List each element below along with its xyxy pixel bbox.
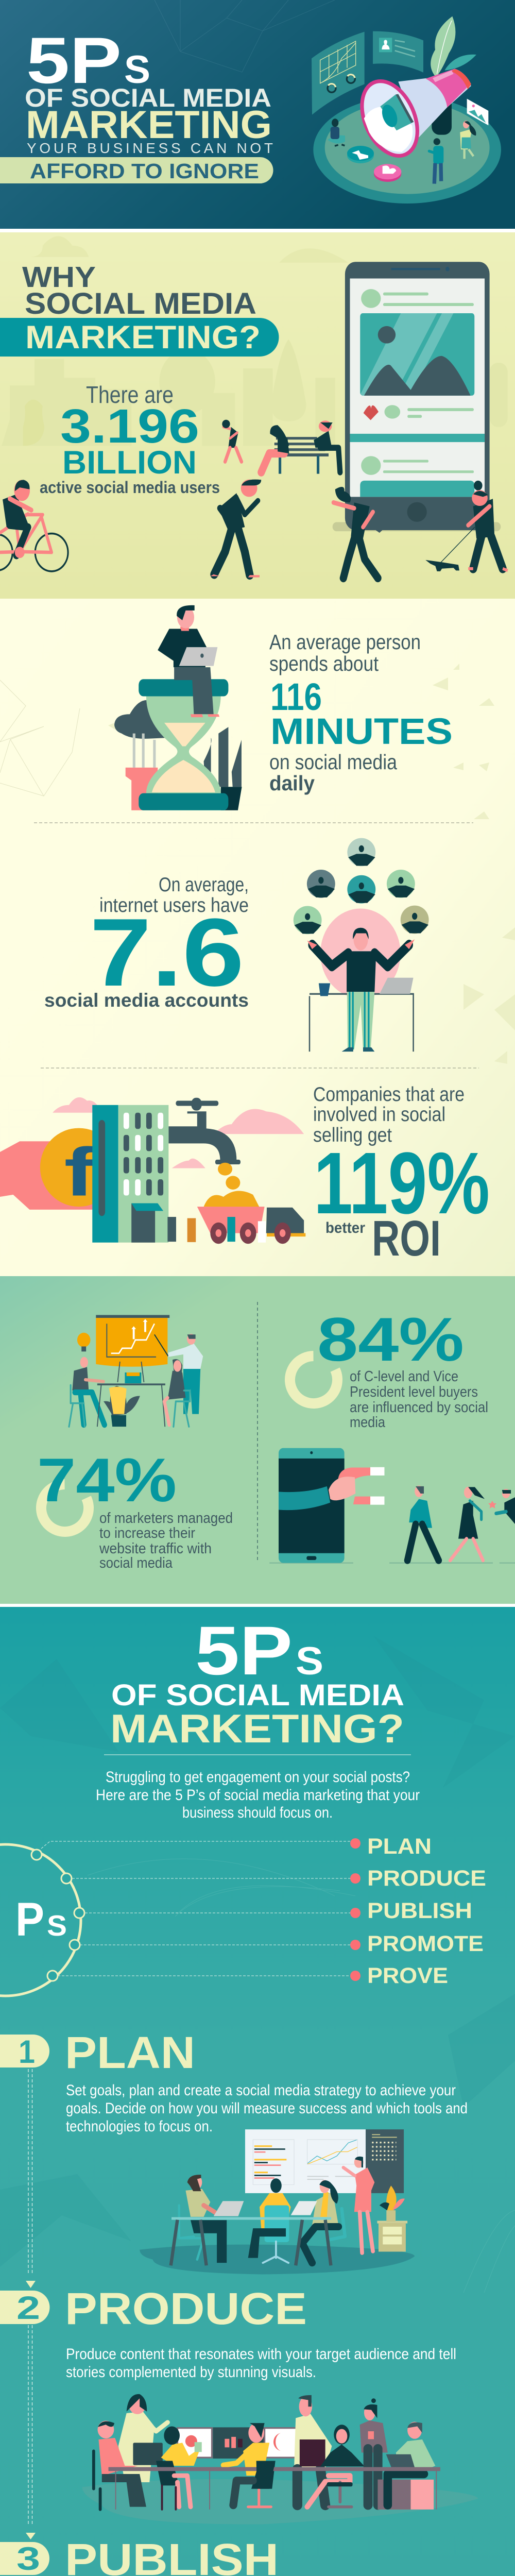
stat: 7.6 social media accounts: social media accounts bbox=[44, 990, 249, 1011]
stat: 7.6 social media accounts bbox=[44, 874, 249, 1011]
step 2: produce: Produce content that resonates with your target audience and tell bbox=[66, 2346, 456, 2363]
illustration: presentation meeting bbox=[69, 1315, 203, 1427]
stat: 116 minutes: An average person bbox=[269, 630, 421, 654]
panel: why social media marketing bbox=[0, 232, 515, 599]
bench pair bbox=[261, 420, 340, 474]
stat: 74 percent: website traffic with bbox=[99, 1540, 212, 1557]
heading: 5Ps of social media marketing: OF SOCIAL MEDIA bbox=[111, 1679, 404, 1712]
stat: 116 minutes: on social media bbox=[269, 750, 397, 774]
step 1: plan bbox=[0, 2028, 468, 2288]
diagram: Ps circle with list: PRODUCE bbox=[367, 1866, 486, 1891]
stat: 3.196 billion users bbox=[40, 381, 220, 497]
panel: header bbox=[0, 0, 515, 229]
step 2: produce bbox=[0, 2284, 478, 2539]
stat: 116 minutes: daily bbox=[269, 771, 315, 795]
diagram: Ps circle with list bbox=[0, 1834, 486, 1996]
stat: 116 minutes: spends about bbox=[269, 652, 379, 675]
step 2: produce: 2 bbox=[16, 2290, 40, 2326]
stat: 74 percent: 74% bbox=[37, 1446, 177, 1515]
illustration: megaphone on disc bbox=[312, 16, 501, 204]
stat: 7.6 social media accounts: On average, bbox=[159, 874, 249, 896]
panel: green statistics bbox=[0, 1276, 515, 1604]
stat: 119% better ROI: Companies that are bbox=[313, 1083, 465, 1106]
stat: 119% better ROI bbox=[313, 1083, 490, 1266]
step 3: publish: 3 bbox=[16, 2541, 40, 2576]
diagram: Ps circle with list: PROMOTE bbox=[367, 1931, 484, 1956]
stat: 84 percent: are influenced by social bbox=[350, 1399, 488, 1416]
step 1: plan: technologies to focus on. bbox=[66, 2118, 213, 2135]
stat: 74 percent: to increase their bbox=[99, 1525, 195, 1541]
stat: 7.6 social media accounts: 7.6 bbox=[90, 899, 244, 1006]
stat: 116 minutes bbox=[269, 630, 453, 795]
title: 5Ps of social media marketing: YOUR BUSINESS CAN NOT bbox=[27, 140, 273, 156]
stat: 84 percent: 84% bbox=[317, 1305, 464, 1374]
intro text: business should focus on. bbox=[182, 1804, 333, 1821]
illustration: team reviewing charts bbox=[140, 2129, 415, 2274]
stat: 84 percent bbox=[282, 1305, 488, 1431]
stat: 116 minutes: MINUTES bbox=[270, 711, 453, 752]
title: 5Ps of social media marketing bbox=[25, 24, 273, 156]
illustration: phone and people bbox=[0, 262, 508, 578]
stat: 84 percent: of C-level and Vice bbox=[350, 1368, 458, 1385]
illustration: phone magnet attracting people bbox=[269, 1448, 515, 1563]
illustration: content production team bbox=[82, 2394, 478, 2524]
stat: 3.196 billion users: BILLION bbox=[62, 445, 197, 481]
panel: 5Ps of social media marketing teal section bbox=[0, 1607, 515, 2576]
stat: 119% better ROI: selling get bbox=[313, 1124, 392, 1146]
stat: 119% better ROI: ROI bbox=[372, 1210, 441, 1266]
stat: 3.196 billion users: 3.196 bbox=[60, 399, 199, 453]
illustration: hourglass bbox=[114, 605, 242, 810]
woman with handbag bbox=[334, 487, 388, 578]
heading: 5Ps of social media marketing bbox=[110, 1613, 404, 1751]
step 1: plan: PLAN bbox=[65, 2028, 195, 2078]
cyclist bbox=[0, 480, 68, 571]
stat: 74 percent: of marketers managed bbox=[99, 1510, 233, 1527]
diagram: Ps circle with list: S bbox=[47, 1909, 67, 1942]
heading: why social media marketing bbox=[0, 261, 279, 357]
stat: 74 percent bbox=[33, 1446, 233, 1571]
phone bbox=[333, 262, 501, 531]
diagram: Ps circle with list: PROVE bbox=[367, 1963, 448, 1988]
stat: 84 percent: media bbox=[350, 1414, 386, 1431]
background skyline bbox=[2, 236, 508, 446]
stat: 119% better ROI: involved in social bbox=[313, 1104, 445, 1126]
intro text bbox=[96, 1769, 420, 1821]
title: 5Ps of social media marketing: OF SOCIAL MEDIA bbox=[25, 83, 271, 112]
pill: afford to ignore: AFFORD TO IGNORE bbox=[30, 159, 259, 183]
stat: 116 minutes: 116 bbox=[270, 675, 322, 718]
woman with dog bbox=[425, 481, 508, 571]
intro text: Struggling to get engagement on your social posts? bbox=[106, 1769, 410, 1786]
person walking small bbox=[222, 420, 242, 462]
diagram: Ps circle with list: PUBLISH bbox=[367, 1899, 472, 1923]
step 3: publish bbox=[0, 2535, 480, 2576]
step 1: plan: 1 bbox=[19, 2034, 35, 2070]
illustration: money from social media tap: f bbox=[64, 1134, 96, 1211]
heading: why social media marketing: SOCIAL MEDIA bbox=[25, 287, 256, 320]
walking man bbox=[210, 480, 261, 578]
intro text: Here are the 5 P’s of social media marketing that your bbox=[96, 1787, 420, 1804]
diagram: Ps circle with list: PLAN bbox=[367, 1834, 432, 1859]
panel: statistics on cream bbox=[0, 599, 515, 1276]
heading: 5Ps of social media marketing: MARKETING? bbox=[110, 1706, 404, 1751]
stat: 3.196 billion users: active social media users bbox=[40, 478, 220, 497]
stat: 84 percent: President level buyers bbox=[350, 1384, 478, 1400]
title: 5Ps of social media marketing: 5P bbox=[26, 24, 122, 97]
stat: 7.6 social media accounts: internet users have bbox=[99, 894, 249, 917]
illustration: juggling social profiles bbox=[294, 838, 429, 1052]
heading: 5Ps of social media marketing: S bbox=[296, 1639, 323, 1683]
stat: 3.196 billion users: There are bbox=[86, 381, 174, 408]
step 1: plan: Set goals, plan and create a social media strategy to achieve your bbox=[66, 2082, 456, 2099]
step 2: produce: stories complemented by stunning visuals. bbox=[66, 2364, 316, 2381]
illustration: money from social media tap bbox=[0, 1097, 305, 1244]
diagram: Ps circle with list: P bbox=[15, 1893, 44, 1946]
step 2: produce: PRODUCE bbox=[65, 2284, 307, 2334]
pill: afford to ignore bbox=[0, 157, 273, 183]
stat: 119% better ROI: better bbox=[325, 1219, 365, 1236]
heading: why social media marketing: MARKETING? bbox=[25, 319, 261, 355]
stat: 74 percent: social media bbox=[99, 1555, 173, 1571]
heading: 5Ps of social media marketing: 5P bbox=[195, 1613, 293, 1689]
title: 5Ps of social media marketing: MARKETING bbox=[26, 103, 272, 147]
heading: why social media marketing: WHY bbox=[22, 261, 96, 294]
title: 5Ps of social media marketing: S bbox=[124, 48, 150, 92]
